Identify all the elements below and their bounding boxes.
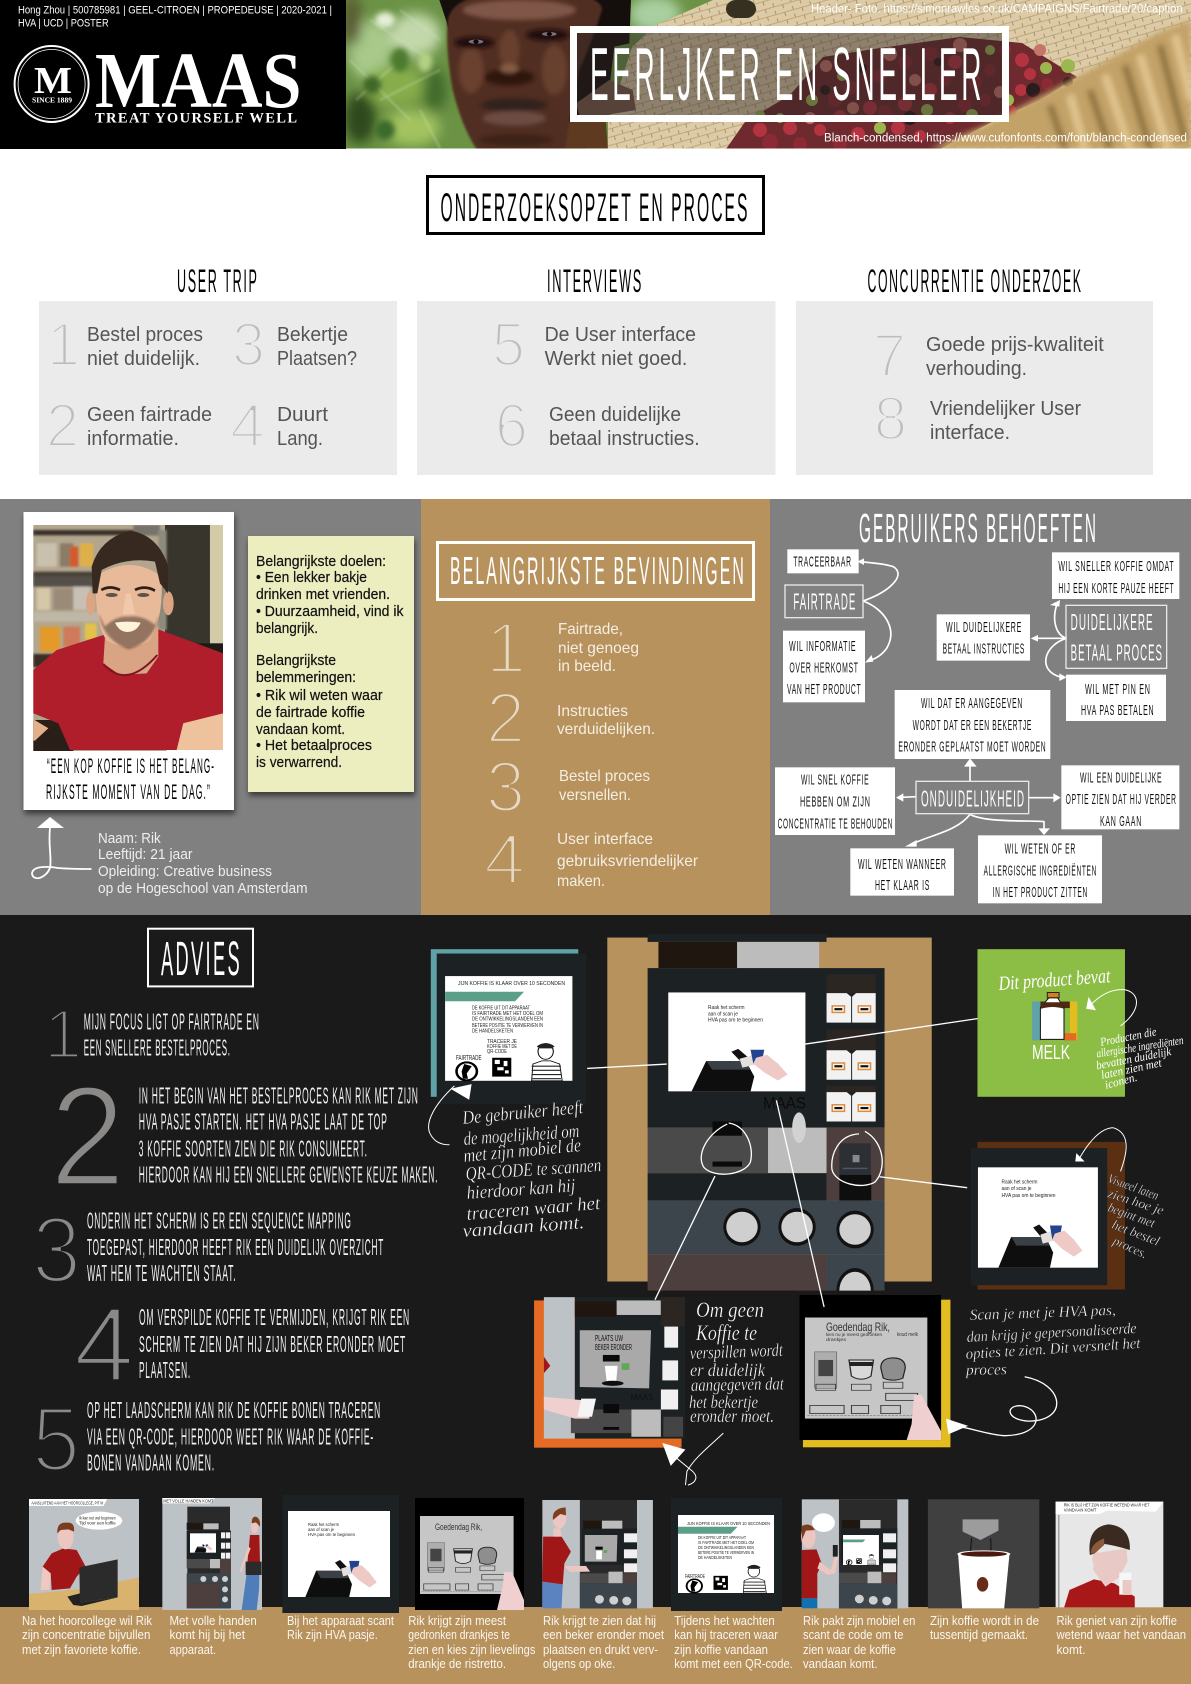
- handwritten note: Koffie te: [695, 1320, 757, 1345]
- header photo: farmer with coffee berries: [342, 0, 1191, 153]
- caption 8: Zijn koffie wordt in de: [930, 1614, 1039, 1628]
- handwritten note: proces: [965, 1361, 1007, 1379]
- sticky note: goals and barriers: Belangrijkste: [256, 652, 336, 669]
- finding 7: verhouding.: [926, 357, 1027, 380]
- photo credit top: Header- Foto, https://simonrawles.co.uk/CAMPAIGNS/Fairtrade/20/caption: [811, 4, 1183, 16]
- finding 2: [486, 680, 655, 758]
- finding 4: 4: [484, 820, 525, 900]
- student credit line: [18, 5, 332, 30]
- sticky note: goals and barriers: • Duurzaamheid, vind ik: [256, 603, 404, 620]
- caption 6: zijn koffie vandaan: [674, 1643, 768, 1657]
- sticky note: goals and barriers: [248, 536, 414, 792]
- finding 1: 1: [486, 610, 526, 688]
- machine brand: MAAS: [763, 1093, 806, 1112]
- frame 6: tracing QR: [671, 1498, 782, 1611]
- polaroid of Rik: [24, 512, 234, 810]
- section: onderzoeksopzet en proces: USER TRIP: [177, 263, 258, 299]
- caption 5: [543, 1614, 664, 1671]
- heading box: [148, 929, 253, 986]
- frame 9: enjoying coffee: RIK IS BLIJ HET ZIJN KOFFIE WETEND WAAR HET: [1064, 1503, 1149, 1508]
- caption 2: Met volle handen: [170, 1614, 257, 1628]
- icon: MAAS round logo: [15, 46, 89, 122]
- screen text: BEKER ERONDER: [595, 1343, 632, 1352]
- wil weten wanneer: [850, 848, 954, 896]
- caption 9: komt.: [1056, 1643, 1086, 1657]
- basket: [608, 0, 1191, 149]
- screen sketch text: koud melk: [897, 1332, 918, 1338]
- screen text: [595, 1334, 654, 1402]
- finding 8: interface.: [930, 421, 1010, 444]
- icon: MAAS round logo: M: [34, 60, 72, 102]
- connector lines and highlight loops: [587, 1019, 977, 1307]
- frame 5: placing cup: [542, 1500, 653, 1608]
- section: advies: ADVIES: [161, 933, 242, 986]
- icon: MAAS round logo: SINCE 1889: [32, 97, 73, 105]
- finding 2: 2: [486, 680, 525, 758]
- screen text: FAIRTRADE: [456, 1055, 482, 1062]
- need diagram: ONDUIDELIJKHEID: [921, 786, 1025, 812]
- advice 4: 4: [74, 1286, 134, 1404]
- advice 3: 3: [32, 1197, 81, 1302]
- frame 6: tracing QR: FAIRTRADE: [685, 1574, 705, 1580]
- frame 9: enjoying coffee: [1056, 1502, 1163, 1607]
- finding 6: betaal instructies.: [549, 427, 700, 450]
- finding 2: informatie.: [87, 427, 179, 450]
- wil een duidelijke optie: [1061, 765, 1179, 830]
- caption 8: tussentijd gemaakt.: [930, 1628, 1028, 1642]
- frame 4: choosing drink: [415, 1498, 524, 1610]
- caption 4: [408, 1614, 535, 1671]
- wil weten allergische ingredienten: [978, 835, 1102, 903]
- panel: user trip: [39, 301, 397, 475]
- handwritten note: eronder moet.: [690, 1406, 774, 1426]
- sticky note: goals and barriers: de fairtrade koffie: [256, 704, 365, 721]
- screen text: TRACEER JE: [487, 1039, 517, 1045]
- header black logo block: [0, 0, 346, 149]
- frame 1: after lecture: Ik kan net wel beginnen: [79, 1515, 116, 1520]
- finding 3: Plaatsen?: [277, 347, 357, 370]
- section: advies: OM VERSPILDE KOFFIE TE VERMIJDEN, KRIJGT RIK EEN: [139, 1304, 410, 1330]
- panel: persona: RIJKSTE MOMENT VAN DE DAG.”: [46, 781, 211, 804]
- traceerbaar: TRACEERBAAR: [793, 554, 852, 571]
- sticky note: goals and barriers: • Het betaalproces: [256, 737, 372, 754]
- frame 6: tracing QR: DE HANDELSKETEN: [698, 1555, 732, 1560]
- handwritten note: Scan je met je HVA pas,: [970, 1302, 1116, 1324]
- text: BELANGRIJKSTE BEVINDINGEN: [450, 550, 746, 593]
- wil duidelijkere betaal instructies: [937, 614, 1030, 661]
- panel: belangrijkste bevindingen: [421, 499, 770, 915]
- frame 8: coffee pouring: [928, 1499, 1039, 1608]
- wil een duidelijke optie: KAN GAAN: [1100, 813, 1142, 830]
- advice 1: [44, 995, 260, 1073]
- screen text: Raak het scherm: [1002, 1180, 1038, 1186]
- machine screen text: aan of scan je: [708, 1011, 738, 1017]
- caption 9: [1056, 1614, 1186, 1657]
- section: advies: SCHERM TE ZIEN DAT HIJ ZIJN BEKER ERONDER MOET: [139, 1331, 406, 1357]
- section: advies: TOEGEPAST, HIERDOOR HEEFT RIK EEN DUIDELIJK OVERZICHT: [87, 1234, 384, 1260]
- caption 2: apparaat.: [170, 1643, 216, 1657]
- advice 4: [74, 1286, 410, 1404]
- persona details: Opleiding: Creative business: [98, 863, 272, 880]
- finding 4: User interface: [557, 831, 653, 848]
- handwritten note: het bekertje: [689, 1392, 758, 1412]
- caption 6: kan hij traceren waar: [674, 1628, 778, 1642]
- finding 7: [873, 322, 1104, 390]
- handwritten note: [1105, 1171, 1166, 1261]
- callout: place your cup: [534, 1297, 785, 1485]
- machine screen text: Raak het scherm: [708, 1005, 745, 1011]
- persona details: Leeftijd: 21 jaar: [98, 846, 192, 863]
- advice 5: BONEN VANDAAN KOMEN.: [87, 1450, 215, 1476]
- heading box: [428, 176, 764, 234]
- wil weten allergische ingredienten: WIL WETEN OF ER: [1005, 841, 1076, 858]
- caption 1: Na het hoorcollege wil Rik: [22, 1614, 153, 1628]
- frame 6: tracing QR: DE KOFFIE UIT DIT APPARAAT: [698, 1535, 746, 1540]
- finding 1: [47, 310, 203, 378]
- finding 3: [232, 310, 357, 378]
- wil snel koffie: WIL SNEL KOFFIE: [801, 772, 869, 789]
- wil dat er aangegeven: WIL DAT ER AANGEGEVEN: [921, 695, 1023, 712]
- caption 7: scant de code om te: [803, 1628, 904, 1642]
- handwritten note: bevatten duidelijk: [1095, 1044, 1173, 1072]
- caption 5: Rik krijgt te zien dat hij: [543, 1614, 656, 1628]
- handwritten note: het bestel: [1110, 1217, 1162, 1249]
- handwritten note: dan krijg je gepersonaliseerde: [966, 1320, 1137, 1346]
- finding 6: 6: [495, 392, 528, 460]
- advice 3: WAT HEM TE WACHTEN STAAT.: [87, 1260, 236, 1286]
- callout: allergen screen: [977, 949, 1184, 1097]
- caption 4: drankje de ristretto.: [408, 1657, 506, 1671]
- advice 4: PLAATSEN.: [139, 1357, 191, 1383]
- advice 5: [32, 1388, 381, 1490]
- finding 2: Geen fairtrade: [87, 403, 212, 426]
- finding 5: [492, 310, 696, 378]
- handwritten note: opties te zien. Dit versnelt het: [965, 1335, 1142, 1363]
- coffee machine illustration: [607, 934, 932, 1291]
- wil met pin: [1066, 675, 1166, 721]
- frame 2: arrives at machine: [162, 1498, 262, 1610]
- handwritten note: Visueel laten: [1106, 1171, 1161, 1203]
- wil informatie: WIL INFORMATIE: [789, 638, 856, 655]
- finding 1: niet duidelijk.: [87, 347, 200, 370]
- caption 7: Rik pakt zijn mobiel en: [803, 1614, 915, 1628]
- finding 4: [230, 392, 328, 460]
- screen text: PLAATS UW: [595, 1334, 623, 1343]
- section: advies: VIA EEN QR-CODE, HIERDOOR WEET RIK WAAR DE KOFFIE-: [87, 1424, 374, 1450]
- storyboard: [0, 1495, 1191, 1684]
- wil snel koffie: [775, 767, 895, 835]
- wil dat er aangegeven: WORDT DAT ER EEN BEKERTJE: [913, 717, 1032, 734]
- frame 3: scanning pass: aan of scan je: [308, 1527, 334, 1532]
- finding 2: verduidelijken.: [557, 721, 655, 738]
- frame 6: tracing QR: BETERE POSITIE TE VERWERVEN IN: [698, 1550, 754, 1555]
- farmer face: [439, 0, 636, 153]
- heading box: [438, 542, 754, 600]
- finding 4: 4: [230, 392, 265, 460]
- wil dat er aangegeven: [895, 690, 1050, 759]
- frame 4: choosing drink: Goedendag Rik,: [435, 1522, 482, 1532]
- caption 3: Rik zijn HVA pasje.: [287, 1628, 378, 1642]
- machine screen text: HVA pas om te beginnen: [708, 1018, 763, 1024]
- frame 7: scanning code with phone: [801, 1499, 908, 1608]
- arrows: [857, 558, 1067, 847]
- caption 3: Bij het apparaat scant: [287, 1614, 394, 1628]
- sticky note: goals and barriers: drinken met vrienden.: [256, 586, 390, 603]
- finding 7: 7: [873, 322, 906, 390]
- finding 4: Duurt: [277, 403, 328, 426]
- screen text: DE KOFFIE UIT DIT APPARAAT: [472, 1006, 531, 1012]
- frame 6: tracing QR: IS FAIRTRADE MET HET DOEL OM: [698, 1540, 754, 1545]
- caption 4: zien en kies zijn lievelings: [408, 1643, 535, 1657]
- advice 5: 5: [32, 1388, 80, 1490]
- wil weten wanneer: WIL WETEN WANNEER: [858, 856, 947, 873]
- caption 1: met zijn favoriete koffie.: [22, 1643, 141, 1657]
- wil duidelijkere betaal instructies: WIL DUIDELIJKERE: [946, 619, 1022, 636]
- tagline: TREAT YOURSELF WELL: [95, 110, 297, 126]
- frame 1: after lecture: [29, 1499, 139, 1610]
- font credit bottom: Blanch-condensed, https://www.cufonfonts.com/font/blanch-condensed: [824, 133, 1187, 145]
- finding 5: 5: [492, 310, 525, 378]
- caption 6: komt met een QR-code.: [674, 1657, 793, 1671]
- caption 4: gedronken drankjes te: [408, 1628, 510, 1642]
- frame 3: scanning pass: HVA pas om te beginnen: [308, 1532, 355, 1537]
- handwritten note: Producten die: [1098, 1024, 1158, 1049]
- section: advies: [0, 915, 1191, 1607]
- finding 4: maken.: [557, 873, 605, 890]
- caption 9: Rik geniet van zijn koffie: [1056, 1614, 1177, 1628]
- finding 1: 1: [47, 310, 80, 378]
- finding 1: niet genoeg: [558, 640, 639, 657]
- persona details: op de Hogeschool van Amsterdam: [98, 880, 308, 897]
- finding 5: De User interface: [545, 323, 696, 346]
- student credit line: Hong Zhou | 500785981 | GEEL-CITROEN | PROPEDEUSE | 2020-2021 |: [18, 5, 332, 17]
- need diagram: BETAAL INSTRUCTIES: [943, 641, 1025, 658]
- screen text: DE HANDELSKETEN: [472, 1028, 513, 1034]
- screen sketch text: Goedendag Rik,: [826, 1320, 890, 1334]
- wil informatie: OVER HERKOMST: [789, 660, 859, 677]
- finding 3: versnellen.: [559, 787, 631, 804]
- panel: concurrentie onderzoek: [796, 301, 1153, 475]
- frame 3: scanning pass: [282, 1495, 399, 1613]
- panel: persona: [0, 499, 421, 915]
- traceerbaar: [787, 549, 859, 573]
- finding 6: [495, 392, 700, 460]
- handwritten note: aangegeven dat: [691, 1373, 785, 1395]
- handwritten note: [1095, 1024, 1184, 1092]
- section: advies: OP HET LAADSCHERM KAN RIK DE KOFFIE BONEN TRACEREN: [87, 1397, 381, 1423]
- sticky note: goals and barriers: • Een lekker bakje: [256, 569, 367, 586]
- section: onderzoeksopzet en proces: INTERVIEWS: [547, 263, 643, 299]
- need diagram: CONCENTRATIE TE BEHOUDEN: [778, 816, 893, 833]
- caption 5: olgens op oke.: [543, 1657, 615, 1671]
- finding 2: 2: [46, 392, 79, 460]
- quote: [46, 755, 215, 804]
- finding 4: gebruiksvriendelijker: [557, 853, 699, 870]
- frame 2: arrives at machine: MET VOLLE HANDEN KOMT: [163, 1499, 214, 1504]
- screen sketch text: [826, 1320, 918, 1342]
- handwritten note: hierdoor kan hij: [466, 1175, 576, 1204]
- caption 7: [803, 1614, 915, 1671]
- caption 6: Tijdens het wachten: [674, 1614, 775, 1628]
- MAAS wordmark: MAAS: [95, 38, 302, 125]
- frame 6: tracing QR: JIJN KOFFIE IS KLAAR OVER 10 SECONDEN: [687, 1521, 770, 1526]
- onduidelijkheid node: [916, 781, 1029, 814]
- machine screen text: [708, 1005, 763, 1024]
- handwritten note: De gebruiker heeft: [461, 1097, 585, 1129]
- advice 2: 2: [50, 1057, 125, 1216]
- screen text: DE ONTWIKKELINGSLANDEN EEN: [472, 1016, 543, 1022]
- screen sketch text: kies nu je meest gedronken: [826, 1332, 882, 1337]
- section: advies: IN HET BEGIN VAN HET BESTELPROCES KAN RIK MET ZIJN: [139, 1082, 419, 1108]
- finding 4: Lang.: [277, 427, 323, 450]
- wil sneller koffie: [1052, 552, 1179, 599]
- wil weten wanneer: HET KLAAR IS: [875, 877, 930, 894]
- caption 1: [22, 1614, 153, 1657]
- screen text: JIJN KOFFIE IS KLAAR OVER 10 SECONDEN: [458, 981, 565, 987]
- sticky note: goals and barriers: is verwarrend.: [256, 754, 342, 771]
- caption 7: zien waar de koffie: [803, 1643, 896, 1657]
- finding 1: Fairtrade,: [558, 621, 623, 638]
- callout: QR tracing screen: [429, 949, 602, 1242]
- section: onderzoeksopzet en proces: [39, 176, 1153, 475]
- handwritten note: [689, 1297, 785, 1426]
- sticky note: goals and barriers: vandaan komt.: [256, 721, 345, 738]
- finding 3: Bestel proces: [559, 768, 650, 785]
- handwritten note: met zijn mobiel de: [463, 1135, 582, 1167]
- handwritten note: proces.: [1110, 1233, 1150, 1261]
- screen text: KOFFIE MET DE: [487, 1044, 517, 1050]
- frame 9: enjoying coffee: VANDAAN KOMT: [1064, 1508, 1096, 1513]
- caption 2: komt hij bij het: [170, 1628, 245, 1642]
- section: advies: EEN SNELLERE BESTELPROCES.: [84, 1034, 231, 1060]
- persona details: Naam: Rik: [98, 830, 161, 847]
- finding 1: in beeld.: [558, 658, 616, 675]
- handwritten note: zien hoe je: [1105, 1185, 1166, 1218]
- caption 5: een beker eronder moet: [543, 1628, 664, 1642]
- finding 3: 3: [486, 748, 525, 828]
- wil snel koffie: HEBBEN OM ZIJN: [800, 794, 871, 811]
- arrow: persona details to polaroid: [32, 817, 92, 878]
- handwritten note: de mogelijkheid om: [463, 1121, 580, 1150]
- section: advies: HVA PASJE STARTEN. HET HVA PASJE LAAT DE TOP: [139, 1108, 388, 1134]
- caption 7: vandaan komt.: [803, 1657, 878, 1671]
- finding 8: [874, 384, 1081, 452]
- advice 3: [32, 1197, 384, 1302]
- panel: persona: “EEN KOP KOFFIE IS HET BELANG-: [47, 755, 215, 778]
- caption 3: [287, 1614, 394, 1642]
- blurred basket rim: [930, 20, 1191, 149]
- frame 1: after lecture: Tijd voor een koffie: [79, 1521, 116, 1526]
- advice 1: 1: [44, 995, 82, 1073]
- frame 1: after lecture: AANSLUITEND AAN HET HOORCOLLEGE, PIT M: [31, 1501, 103, 1506]
- caption 2: [170, 1614, 257, 1657]
- frame 3: scanning pass: Raak het scherm: [308, 1522, 339, 1527]
- panel: interviews: [417, 301, 776, 475]
- screen text: [456, 981, 565, 1062]
- finding 8: 8: [874, 384, 907, 452]
- wil informatie: [783, 631, 865, 702]
- handwritten note: [461, 1097, 602, 1242]
- section: advies: 3 KOFFIE SOORTEN ZIEN DIE RIK CONSUMEERT.: [139, 1136, 368, 1162]
- handwritten heading: Dit product bevat: [997, 965, 1111, 995]
- handwritten note: vandaan komt.: [462, 1212, 585, 1242]
- handwritten note: verspillen wordt: [689, 1340, 784, 1363]
- screen text: [1002, 1180, 1056, 1199]
- caption 5: plaatsen en drukt verv-: [543, 1643, 658, 1657]
- header: [0, 0, 1191, 153]
- screen text: QR-CODE: [487, 1049, 507, 1055]
- coffee berries: [726, 37, 1077, 151]
- caption 8: [930, 1614, 1039, 1642]
- persona details: [98, 830, 308, 897]
- finding 5: Werkt niet goed.: [545, 347, 687, 370]
- screen text: BETERE POSITIE TE VERWERVEN IN: [472, 1023, 543, 1029]
- screen text: aan of scan je: [1002, 1186, 1032, 1192]
- caption 1: zijn concentratie bijvullen: [22, 1628, 150, 1642]
- callout: personalised options: [800, 1295, 1142, 1447]
- student credit line: HVA | UCD | POSTER: [18, 18, 109, 30]
- need diagram: [775, 549, 1179, 903]
- finding 6: Geen duidelijke: [549, 403, 681, 426]
- need diagram: VAN HET PRODUCT: [787, 681, 861, 698]
- panel: gebruikers behoeften: [770, 499, 1191, 915]
- handwritten note: begint met: [1106, 1200, 1158, 1231]
- handwritten note: [965, 1302, 1142, 1379]
- caption 6: [674, 1614, 793, 1671]
- finding 3: 3: [232, 310, 265, 378]
- screen sketch text: drankjes: [826, 1337, 847, 1342]
- handwritten note: QR-CODE te scannen: [465, 1155, 602, 1185]
- sticky note: goals and barriers: • Rik wil weten waar: [256, 687, 383, 704]
- screen text: HVA pas om te beginnen: [1002, 1193, 1056, 1199]
- handwritten note: traceren waar het: [466, 1193, 602, 1225]
- screen text: MAAS: [630, 1393, 654, 1402]
- main title box: [574, 30, 1006, 118]
- handwritten note: laten zien met: [1100, 1055, 1163, 1082]
- finding 7: Goede prijs-kwaliteit: [926, 333, 1104, 356]
- handwritten note: iconen.: [1103, 1070, 1139, 1092]
- sticky note: goals and barriers: Belangrijkste doelen:: [256, 553, 386, 570]
- fairtrade node: [785, 585, 863, 618]
- portrait photo: [33, 525, 223, 752]
- frame 6: tracing QR: DE ONTWIKKELINGSLANDEN EEN: [698, 1545, 754, 1550]
- sticky note: goals and barriers: belangrijk.: [256, 620, 318, 637]
- duidelijkere betaal proces node: [1066, 605, 1167, 668]
- finding 3: Bekertje: [277, 323, 348, 346]
- section: advies: ONDERIN HET SCHERM IS ER EEN SEQUENCE MAPPING: [87, 1208, 352, 1234]
- finding 2: [46, 392, 212, 460]
- callout: start screen: [971, 1128, 1166, 1290]
- advice 2: [50, 1057, 438, 1216]
- handwritten note: Om geen: [696, 1297, 764, 1322]
- finding 4: [484, 820, 699, 900]
- caption 4: Rik krijgt zijn meest: [408, 1614, 506, 1628]
- finding 1: [486, 610, 639, 688]
- finding 1: Bestel proces: [87, 323, 203, 346]
- label milk: MELK: [1032, 1042, 1070, 1064]
- need diagram: FAIRTRADE: [793, 588, 856, 614]
- finding 8: Vriendelijker User: [930, 397, 1081, 420]
- section: advies: MIJN FOCUS LIGT OP FAIRTRADE EN: [84, 1008, 260, 1034]
- section: advies: HIERDOOR KAN HIJ EEN SNELLERE GEWENSTE KEUZE MAKEN.: [139, 1162, 438, 1188]
- screen text: IS FAIRTRADE MET HET DOEL OM: [472, 1011, 543, 1017]
- finding 2: Instructies: [557, 703, 628, 720]
- handwritten note: er duidelijk: [690, 1360, 766, 1380]
- sticky note: goals and barriers: belemmeringen:: [256, 669, 356, 686]
- finding 3: [486, 748, 650, 828]
